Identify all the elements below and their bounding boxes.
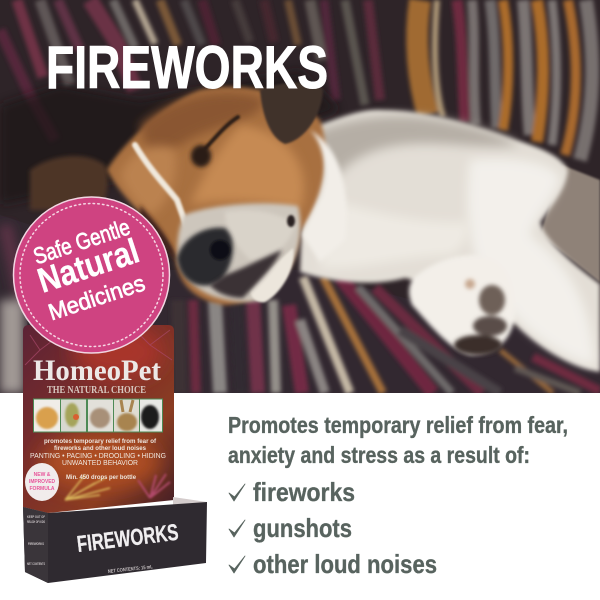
tagline: THE NATURAL CHOICE xyxy=(47,385,146,396)
intro statement: anxiety and stress as a result of: xyxy=(228,442,530,468)
dog body xyxy=(300,110,600,372)
pet photos strip xyxy=(33,398,163,432)
box description: UNWANTED BEHAVIOR xyxy=(62,460,138,467)
new formula badge: FORMULA xyxy=(30,486,55,492)
box front panel: FIREWORKS xyxy=(28,542,44,546)
badge: Safe Gentle Natural Medicines xyxy=(14,197,170,353)
box front panel: REACH OF KIDS xyxy=(27,520,45,524)
new formula badge xyxy=(25,463,59,501)
shadow beneath blanket xyxy=(0,70,340,205)
chin xyxy=(250,248,293,302)
badge: Safe Gentle Natural Medicines: Safe Gentle xyxy=(30,214,133,269)
new formula badge: NEW & xyxy=(34,472,51,478)
box description: PANTING • PACING • DROOLING • HIDING xyxy=(30,453,166,460)
product box: HomeoPet xyxy=(20,320,207,583)
white neck edge xyxy=(302,130,347,262)
muzzle xyxy=(177,203,301,302)
blaze xyxy=(135,145,186,225)
paw pads xyxy=(454,279,507,355)
lower blanket xyxy=(0,215,600,393)
benefits text block xyxy=(228,412,568,579)
box front panel: KEEP OUT OF xyxy=(27,515,45,519)
box front panel xyxy=(23,497,207,583)
photo: sleeping dog on striped blanket xyxy=(0,0,600,393)
title: FIREWORKS xyxy=(46,34,328,101)
new formula badge: IMPROVED xyxy=(29,479,55,485)
box description: fireworks and other loud noises xyxy=(54,445,146,452)
mouth shadow xyxy=(210,250,282,298)
dog head xyxy=(107,82,325,305)
right cushion xyxy=(540,165,600,282)
upper blanket stripes xyxy=(0,0,592,160)
nose xyxy=(177,228,233,286)
list: triggers: gunshots xyxy=(253,513,352,543)
badge: Safe Gentle Natural Medicines: Medicines xyxy=(45,270,148,325)
box front panel: NET CONTENTS: 15 mL xyxy=(108,564,153,575)
box description xyxy=(30,438,166,481)
sleeve at left of head xyxy=(30,156,108,210)
box description: Min. 450 drops per bottle xyxy=(66,474,136,481)
intro statement xyxy=(228,412,568,468)
list: triggers xyxy=(229,477,437,579)
box description: promotes temporary relief from fear of xyxy=(44,438,157,445)
box artwork xyxy=(20,320,180,515)
badge: Safe Gentle Natural Medicines: Natural xyxy=(33,231,144,301)
list: triggers: fireworks xyxy=(253,477,355,507)
closed eye xyxy=(203,114,242,150)
list: triggers: other loud noises xyxy=(253,549,437,579)
brand name: HomeoPet xyxy=(33,354,161,387)
ear xyxy=(260,82,323,144)
box front panel: FIREWORKS xyxy=(75,519,180,557)
box front panel: NET CONTENTS xyxy=(27,562,45,566)
